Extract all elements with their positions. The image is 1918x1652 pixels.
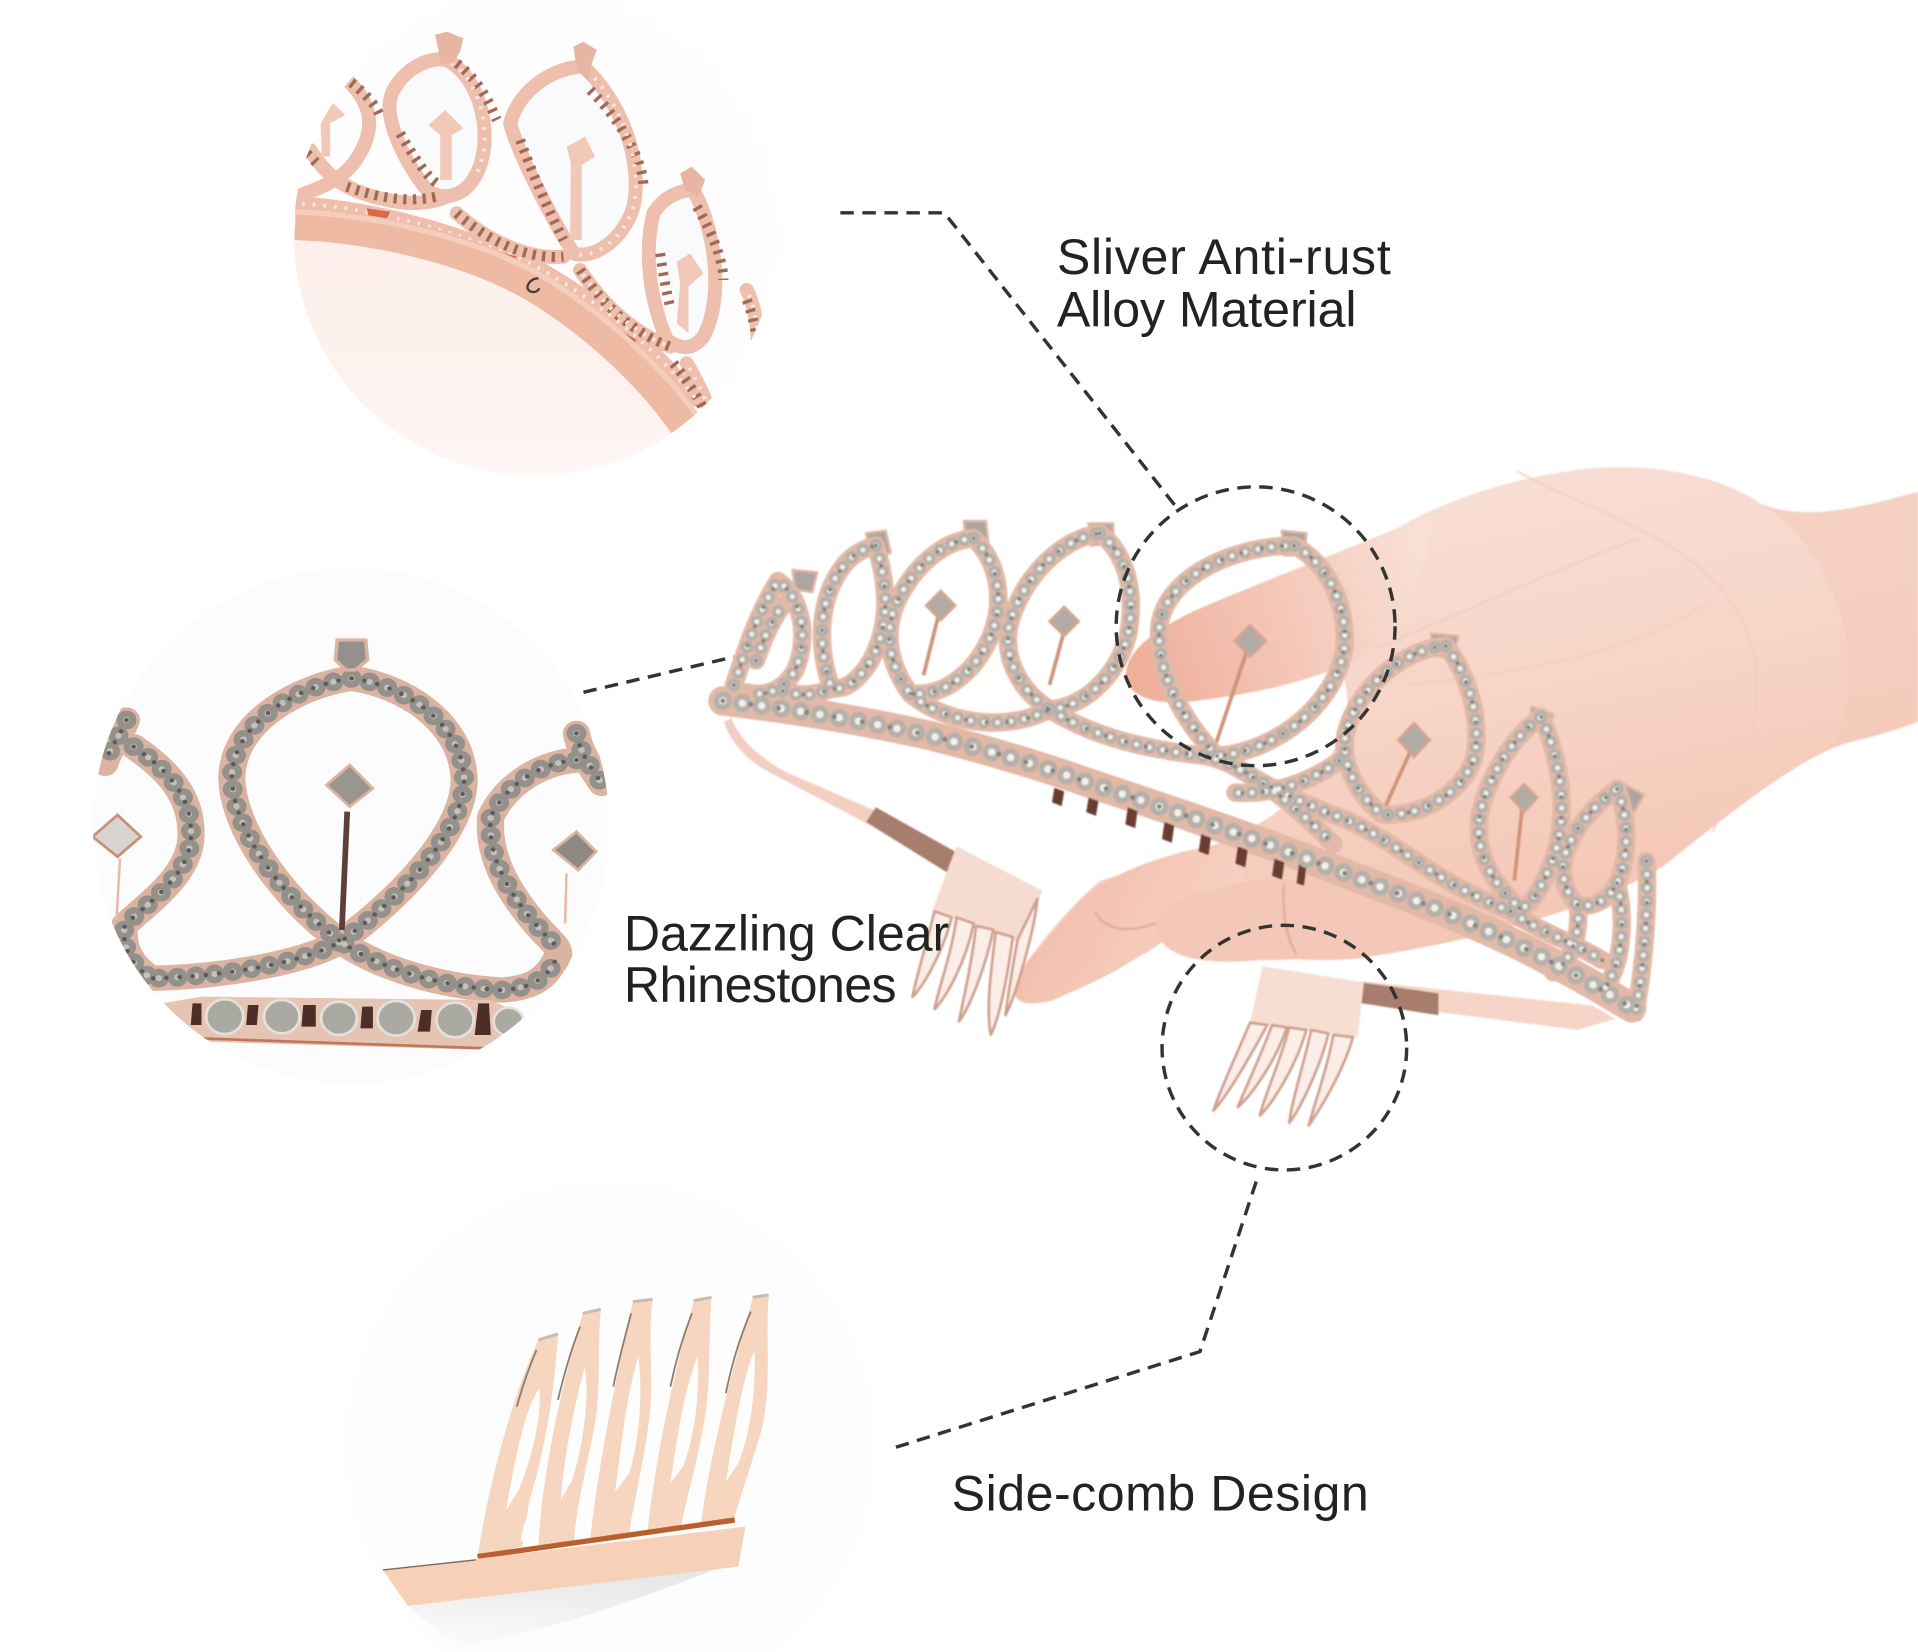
band seam [527,278,539,292]
right comb [1213,966,1364,1125]
callout line: side comb [893,1182,1256,1448]
right diamond and stem [553,832,596,870]
cast shadow [408,1570,714,1625]
circle backdrop [93,568,609,1084]
large band stones [206,999,524,1037]
right band dark segment [1360,982,1438,1015]
label: alloy material [1057,229,1391,338]
left diamond and stem [93,815,141,857]
label: rhinestones [624,905,949,1013]
red glints [367,208,637,347]
metal loops [297,59,758,420]
circle backdrop [347,1183,873,1652]
comb teeth [478,1297,769,1557]
hand [1014,467,1918,1003]
dashed circle: side comb area [1162,925,1407,1170]
metal sparkle [297,60,758,420]
lower fingers [1014,844,1248,1003]
tooth 4 [647,1298,712,1533]
index finger [1125,514,1431,702]
finger crease [1095,883,1297,954]
tooth 5 [701,1297,769,1527]
rose metal settings [723,533,1647,1013]
diamonds and stems [320,102,703,333]
tooth 1 [478,1335,558,1557]
lower band [162,997,523,1050]
comb tines [1213,1023,1353,1125]
stone dark facets [723,533,1647,1013]
label line 2: Rhinestones [624,957,897,1013]
rose metal settings [105,678,601,990]
tiara close-up in metal [295,32,758,435]
top gem [335,640,368,670]
tooth 3 [590,1300,653,1540]
comb body [1250,966,1364,1037]
detail circle: rhinestones close-up [93,638,608,1050]
left band dark segment [866,807,959,875]
label line 1: Sliver Anti-rust [1057,229,1391,285]
centre diamond and stem [326,765,373,807]
stone highlights [105,678,601,990]
left band [724,718,952,871]
crown of rhinestones [93,640,601,1050]
stone dark facets [105,678,601,990]
palm creases [1376,471,1757,832]
grey stones [723,533,1647,1013]
tooth 2 [538,1310,601,1547]
dashed circle: tiara stone area [1116,487,1395,766]
bar top edge [383,1560,476,1570]
right band [1360,981,1616,1030]
comb bar [383,1527,745,1606]
callout line: alloy material [840,213,1177,508]
left comb [913,846,1042,1035]
copper edge [478,1520,735,1557]
metal flecks [307,63,758,423]
tiara [723,521,1647,1125]
white loop interiors [390,59,715,347]
comb body [932,846,1042,944]
tooth openings [506,1350,755,1542]
stems and small diamonds [924,591,1538,881]
tooth edge lines [517,1312,751,1407]
grey stones [105,678,601,990]
wrist shading [1761,492,1918,746]
band square settings [191,1003,491,1035]
top gems [793,521,1644,812]
label line 1: Dazzling Clear [624,905,949,961]
comb close-up [383,1295,769,1647]
crown tips [435,32,705,197]
comb tines [913,899,1037,1035]
detail circle: side comb close-up [382,1294,769,1631]
label line 2: Alloy Material [1057,282,1357,338]
palm and wrist [1014,467,1918,1003]
callout line: rhinestones [583,657,734,692]
pink reflection under band [294,226,671,462]
stone highlights [723,533,1647,1013]
label: side comb: Side-comb Design [952,1466,1369,1522]
band dark settings [1052,788,1306,886]
tooth tips [538,1295,769,1340]
circle backdrop [294,0,776,476]
middle finger tip [1156,878,1407,962]
band [295,224,692,435]
detail circle: alloy material close-up [294,32,762,476]
